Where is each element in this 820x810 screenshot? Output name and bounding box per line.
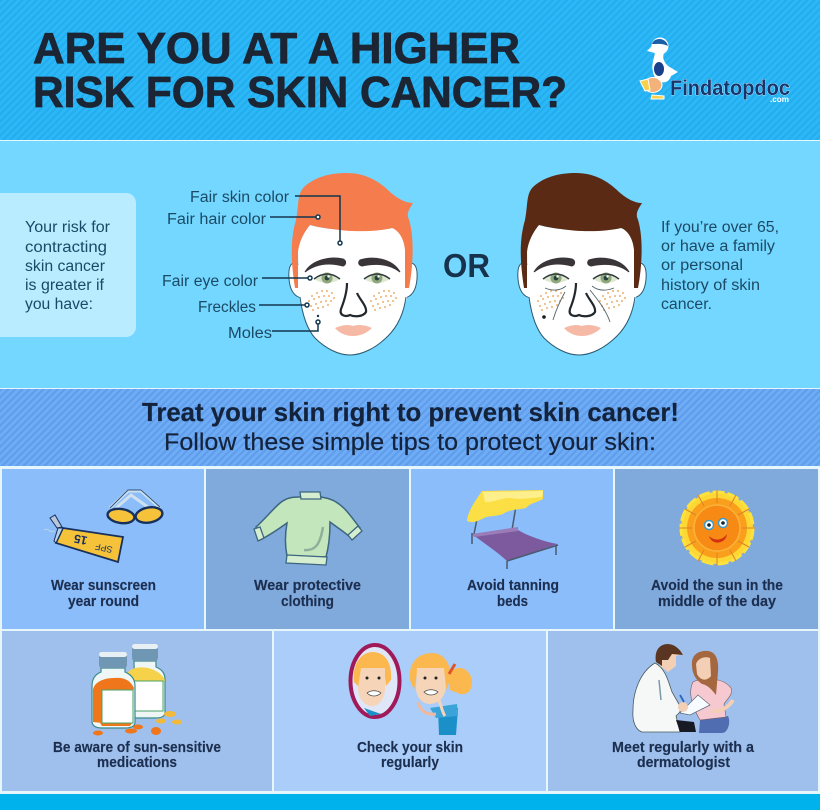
label: regularly: [381, 755, 439, 771]
callout: risk intro: contracting: [25, 239, 107, 256]
label: Meet regularly with a: [612, 740, 755, 756]
label: beds: [497, 594, 528, 610]
callout: risk intro: you have:: [25, 296, 93, 313]
logo: Findatopdoc: .com: [770, 95, 789, 104]
icon: duck mascot: [640, 38, 678, 99]
label: [51, 578, 156, 610]
tip: tanning beds: [411, 469, 613, 629]
callout: risk intro: [0, 193, 136, 337]
icon: sunglasses: [107, 490, 164, 525]
label: Avoid tanning: [467, 578, 559, 594]
text: age and family history: or personal: [661, 257, 743, 274]
label: [357, 740, 463, 771]
label: clothing: [281, 594, 334, 610]
logo: Findatopdoc: Findatopdoc: [670, 77, 790, 100]
label: year round: [68, 594, 139, 610]
tip: check skin: [274, 631, 546, 791]
label: [53, 740, 221, 771]
tip: medications: [2, 631, 272, 791]
label: [254, 578, 361, 610]
text: age and family history: [661, 219, 779, 313]
text: age and family history: If you’re over 65,: [661, 219, 779, 236]
icon: doctor and patient: [633, 644, 733, 733]
label: [467, 578, 559, 610]
labelled risk features: Fair skin color: [190, 189, 289, 206]
tips heading band: Treat your skin right to prevent skin cancer!: [142, 397, 679, 427]
icon: pill bottles: [92, 644, 182, 736]
icon: sweater: [254, 492, 362, 565]
pen and hand: [678, 695, 688, 712]
icon: sunscreen tube: [44, 515, 123, 562]
label: Wear protective: [254, 578, 361, 594]
tip: midday sun: [615, 469, 818, 629]
labelled risk features: [162, 189, 342, 342]
label: Check your skin: [357, 740, 463, 756]
text: age and family history: or have a family: [661, 238, 775, 255]
doctor: [633, 644, 696, 732]
callout: risk intro: skin cancer: [25, 258, 105, 275]
tip: dermatologist: [548, 631, 818, 791]
labelled risk features: Moles: [228, 325, 272, 342]
icon: tanning bed: [467, 490, 558, 569]
footer bar: [0, 794, 820, 810]
patient: [691, 651, 733, 733]
risk factors panel: [0, 141, 820, 388]
label: Avoid the sun in the: [651, 578, 783, 594]
icon: smiling sun: [679, 490, 755, 566]
label: [612, 740, 755, 771]
title: RISK FOR SKIN CANCER?: [33, 68, 567, 117]
logo: Findatopdoc: [640, 38, 790, 104]
labelled risk features: Freckles: [198, 299, 256, 316]
text: age and family history: history of skin: [661, 277, 760, 294]
tips heading band: [0, 389, 820, 466]
tips heading band: Follow these simple tips to protect your skin:: [164, 429, 656, 456]
header panel: [0, 0, 820, 140]
icon: sunscreen tube: SPF: [94, 541, 113, 555]
labelled risk features: Fair eye color: [162, 273, 258, 290]
label: Be aware of sun-sensitive: [53, 740, 221, 756]
icon: sunscreen tube: 15: [72, 531, 89, 548]
label: [651, 578, 783, 610]
callout: risk intro: Your risk for: [25, 219, 110, 236]
title: [33, 24, 567, 117]
icon: mirror reflection: [350, 645, 400, 717]
labelled risk features: Fair hair color: [167, 211, 266, 228]
label: medications: [97, 755, 177, 771]
callout: risk intro: is greater if: [25, 277, 105, 294]
label: dermatologist: [637, 755, 730, 771]
face: fair features: [289, 173, 417, 355]
face: older skin: [518, 173, 646, 355]
OR: OR: [443, 247, 490, 284]
label: middle of the day: [658, 594, 776, 610]
tip: sunscreen: [2, 469, 204, 629]
tip: protective clothing: [206, 469, 409, 629]
text: age and family history: cancer.: [661, 296, 712, 313]
clipboard: [680, 695, 710, 715]
title: ARE YOU AT A HIGHER: [33, 24, 520, 73]
label: Wear sunscreen: [51, 578, 156, 594]
icon: girl checking skin: [410, 653, 472, 735]
